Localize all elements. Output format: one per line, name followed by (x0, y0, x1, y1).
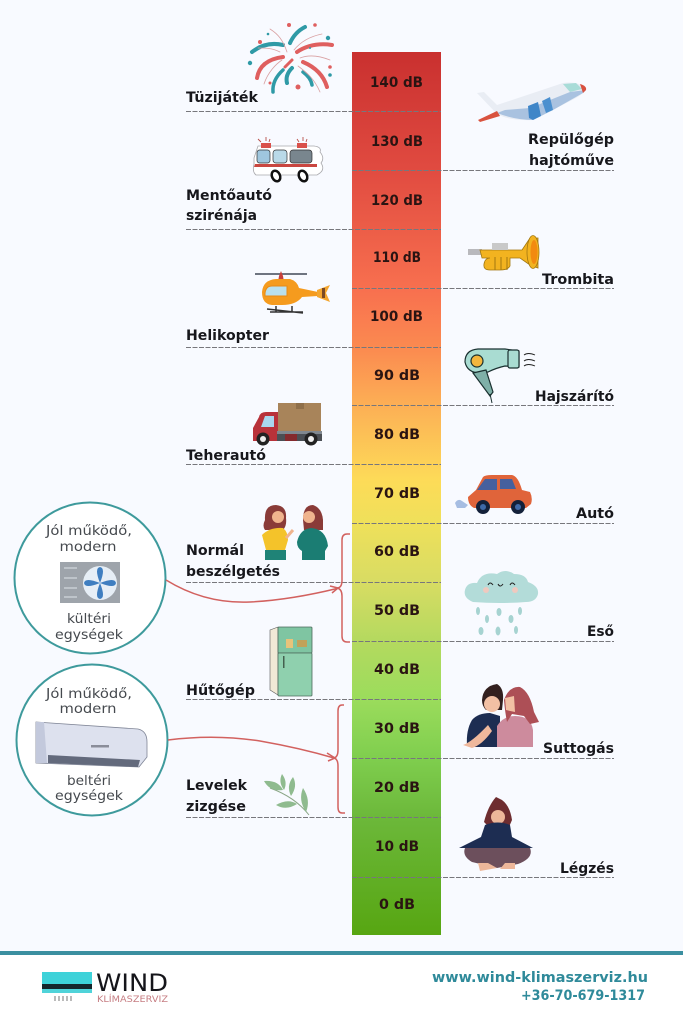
decibel scale bar: 90 dB (374, 368, 420, 384)
icon: car (455, 475, 532, 514)
label: Normál beszélgetés (186, 543, 280, 580)
icon: airplane (477, 83, 586, 122)
icon: ambulance (253, 137, 323, 183)
decibel scale bar: 100 dB (370, 309, 423, 325)
label: Suttogás: Suttogás (543, 741, 614, 757)
decibel scale bar: 130 dB (371, 134, 423, 150)
decibel scale bar: 110 dB (373, 250, 421, 266)
callout: outdoor units: egységek (55, 627, 123, 643)
callout: indoor units: beltéri (67, 773, 111, 789)
label: Autó: Autó (576, 506, 614, 522)
label: Normál beszélgetés: beszélgetés (186, 564, 280, 580)
decibel scale bar: 50 dB (374, 603, 420, 619)
decibel scale bar (352, 52, 441, 935)
callout: indoor units: egységek (55, 788, 123, 804)
label: Mentőautó szirénája (186, 188, 272, 224)
label: Tüzijáték: Tüzijáték (186, 90, 259, 106)
icon: trumpet (468, 236, 539, 270)
icon: hair dryer (465, 349, 535, 403)
icon: women talking (262, 505, 328, 560)
logo: Wind Klímaszerviz: KLÍMASZERVIZ (97, 993, 168, 1005)
label: Repülőgép hajtóműve: hajtóműve (529, 153, 614, 169)
logo: Wind Klímaszerviz (42, 969, 168, 1005)
decibel scale bar: 80 dB (374, 427, 420, 443)
decibel scale bar: 60 dB (374, 544, 420, 560)
label: Mentőautó szirénája: szirénája (186, 208, 257, 224)
callout: outdoor units: modern (60, 539, 116, 555)
footer contact details (432, 970, 648, 1004)
footer divider (0, 951, 683, 955)
icon: truck (253, 403, 322, 446)
decibel scale bar: 10 dB (375, 839, 419, 855)
arrow: indoor units to 20-40 dB range (168, 705, 345, 813)
label: Eső: Eső (587, 624, 614, 640)
callout: indoor units: Jól működő, (45, 686, 132, 702)
decibel scale bar: 0 dB (379, 897, 415, 913)
label: Hűtőgép: Hűtőgép (186, 683, 255, 699)
label: Levelek zizgése: Levelek (186, 778, 248, 794)
arrow: outdoor units to 40-60 dB range (166, 534, 350, 642)
label: Levelek zizgése: zizgése (186, 799, 246, 815)
icon: leaves (264, 774, 309, 815)
label: Repülőgép hajtóműve: Repülőgép (528, 132, 614, 148)
decibel scale bar: 70 dB (374, 486, 420, 502)
label: Helikopter: Helikopter (186, 328, 269, 344)
decibel scale bar: 20 dB (374, 780, 420, 796)
label: Repülőgép hajtóműve (528, 132, 614, 169)
label: Légzés: Légzés (560, 861, 614, 877)
icon: fridge (270, 627, 312, 696)
label: Normál beszélgetés: Normál (186, 543, 244, 559)
decibel scale bar: 140 dB (370, 75, 423, 91)
callout: outdoor units: Jól működő, (45, 523, 132, 539)
footer contact details: +36-70-679-1317 (521, 988, 645, 1004)
label: Hajszárító: Hajszárító (535, 389, 614, 405)
label: Mentőautó szirénája: Mentőautó (186, 188, 272, 204)
icon: meditation (459, 797, 533, 871)
callout: outdoor units: kültéri (67, 611, 111, 627)
decibel scale bar: 120 dB (371, 193, 423, 209)
decibel scale bar: 40 dB (374, 662, 420, 678)
callout: indoor units: modern (60, 701, 116, 717)
label: Trombita: Trombita (542, 272, 614, 288)
icon: fireworks (248, 23, 332, 92)
footer contact details: www.wind-klimaszerviz.hu (432, 970, 648, 986)
label: Teherautó: Teherautó (186, 448, 266, 464)
label: Levelek zizgése (186, 778, 248, 815)
icon: helicopter (255, 271, 330, 313)
logo: Wind Klímaszerviz: WIND (96, 969, 168, 997)
icon: rain cloud (465, 571, 538, 636)
callout: indoor units (16, 664, 168, 816)
icon: whispering women (463, 684, 539, 748)
decibel scale bar: 30 dB (374, 721, 420, 737)
callout: outdoor units (14, 502, 166, 654)
